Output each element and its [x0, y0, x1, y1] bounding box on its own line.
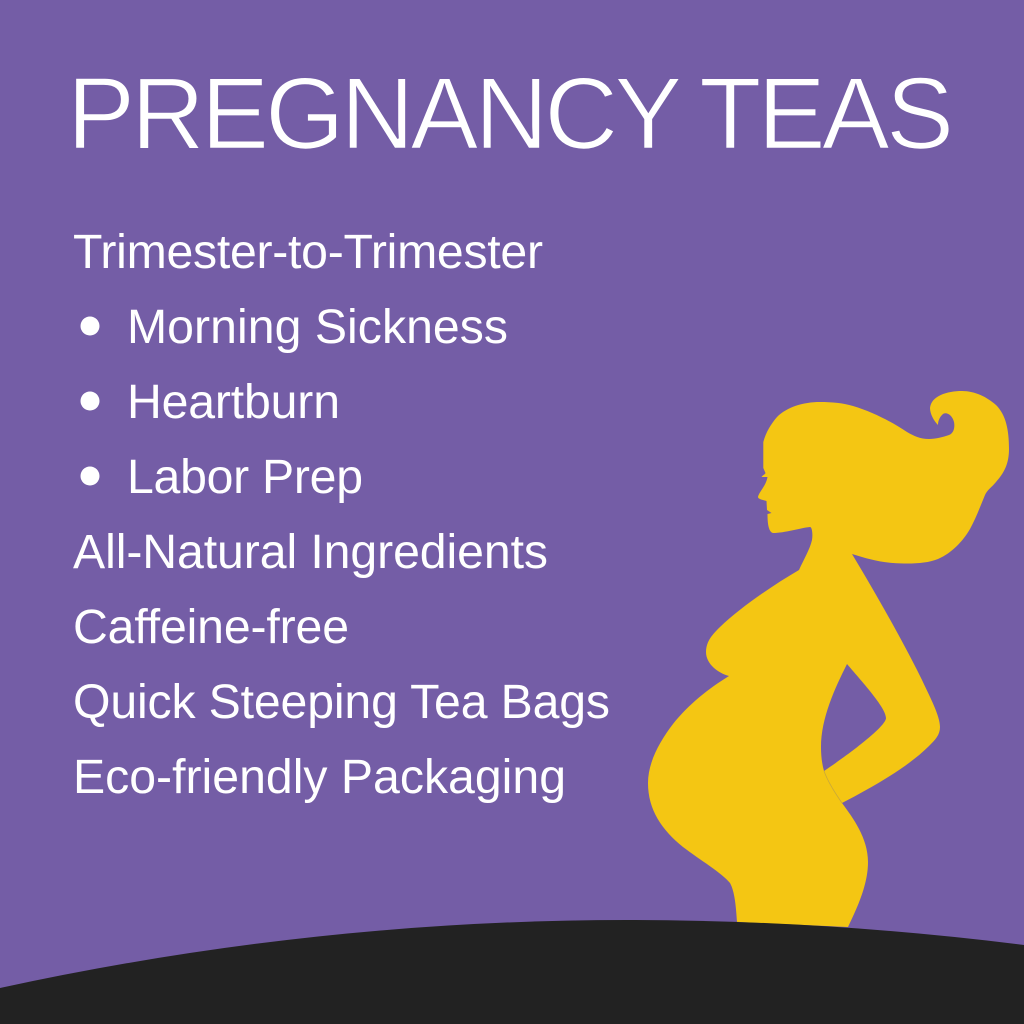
list item: caffeine-free: Caffeine-free — [73, 600, 349, 654]
black ground hill — [0, 920, 1024, 1024]
sub-list item: heartburn: Heartburn — [127, 375, 340, 429]
hip seam — [824, 771, 842, 803]
icon: pregnant woman silhouette — [648, 391, 1009, 927]
list item: trimester-to-trimester: Trimester-to-Trimester — [73, 225, 543, 279]
list item: quick steeping tea bags: Quick Steeping Tea Bags — [73, 675, 610, 729]
title: PREGNANCY TEAS — [67, 56, 954, 170]
sub-list item: labor prep: Labor Prep — [127, 450, 363, 504]
sub-list item: morning sickness: Morning Sickness — [127, 300, 508, 354]
list item: all-natural ingredients: All-Natural Ingredients — [73, 525, 548, 579]
list item: eco-friendly packaging: Eco-friendly Packaging — [73, 750, 566, 804]
feature list — [73, 225, 610, 804]
